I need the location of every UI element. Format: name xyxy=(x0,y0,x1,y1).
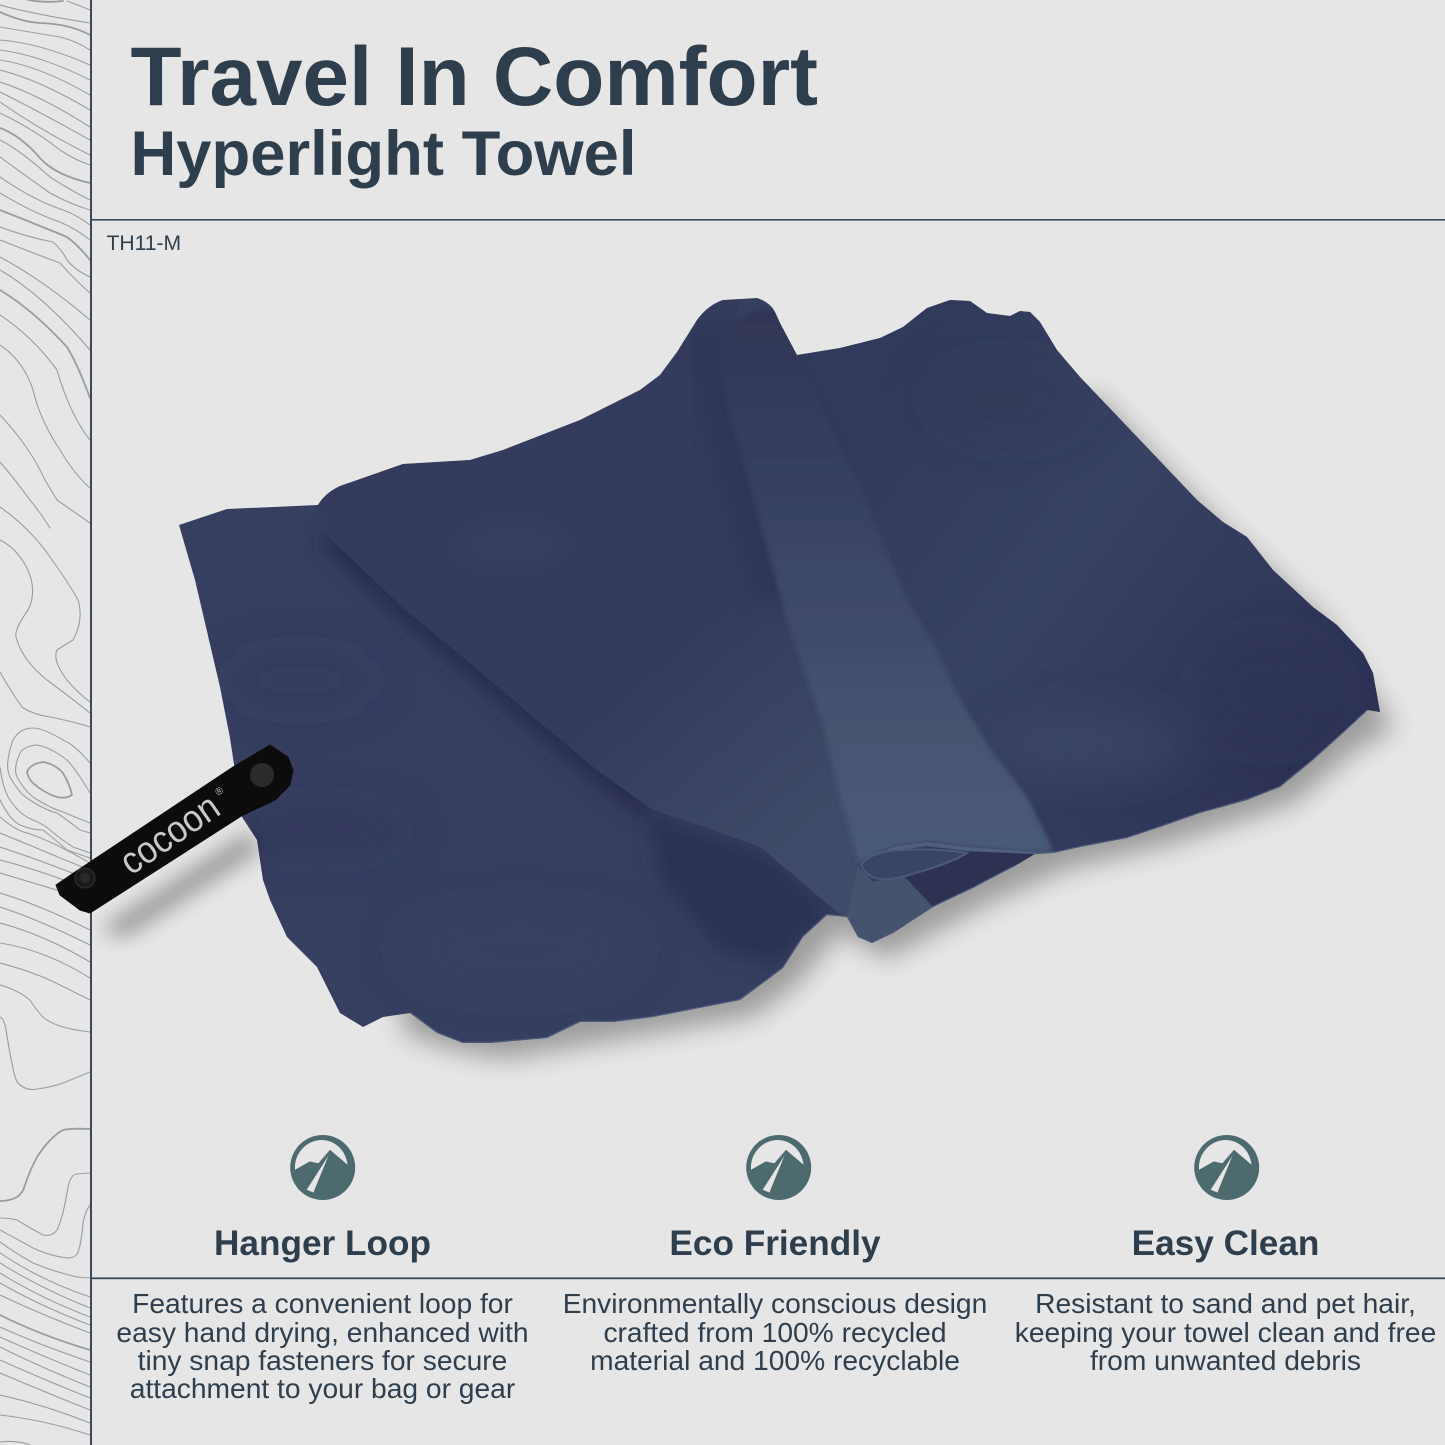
tag shadow xyxy=(100,832,262,938)
stitched hem xyxy=(410,710,1368,1043)
registered mark: ® xyxy=(213,785,226,798)
description: keeping your towel clean and free xyxy=(1015,1316,1436,1348)
title block xyxy=(130,29,818,189)
description: from unwanted debris xyxy=(1090,1344,1361,1376)
crease shadow xyxy=(327,535,653,812)
left towel panel xyxy=(170,290,1390,1050)
topographic contour strip xyxy=(0,0,90,1445)
middle panel dark edge near ridge xyxy=(705,330,775,600)
right panel shading xyxy=(1073,735,1145,756)
right towel panel xyxy=(797,300,1380,853)
description: attachment to your bag or gear xyxy=(130,1372,515,1404)
icon: mountain badge xyxy=(290,1135,355,1200)
description: crafted from 100% recycled xyxy=(603,1316,947,1348)
lower panel dark corner xyxy=(652,821,828,963)
towel xyxy=(170,290,1390,1050)
fold opening xyxy=(861,849,967,879)
rolled fold strip xyxy=(720,309,1053,863)
description: Resistant to sand and pet hair, xyxy=(1035,1287,1416,1319)
shadow beneath the roll xyxy=(900,851,1036,907)
heading: Hanger Loop xyxy=(214,1224,431,1263)
description: Environmentally conscious design xyxy=(563,1287,987,1319)
feature: Easy Clean xyxy=(1015,1135,1436,1376)
icon: mountain badge xyxy=(746,1135,811,1200)
description: Features a convenient loop for xyxy=(132,1287,513,1319)
snap upper xyxy=(250,763,274,787)
mottling on middle panel xyxy=(455,523,565,567)
hanger loop tag xyxy=(56,745,293,938)
heading: Easy Clean xyxy=(1132,1224,1319,1263)
title: Travel In Comfort xyxy=(130,29,818,123)
snap lower xyxy=(75,868,95,888)
product code: TH11-M xyxy=(106,232,181,255)
middle fold panel xyxy=(318,300,860,925)
tag strap xyxy=(56,745,293,913)
description: easy hand drying, enhanced with xyxy=(116,1316,529,1348)
feature: Eco Friendly xyxy=(563,1135,987,1376)
lower lip of fold xyxy=(847,866,933,943)
feature: Hanger Loop xyxy=(116,1135,529,1404)
description: tiny snap fasteners for secure xyxy=(138,1344,507,1376)
icon: mountain badge xyxy=(1194,1135,1259,1200)
soft mottling on left panel xyxy=(248,826,258,845)
subtitle: Hyperlight Towel xyxy=(130,119,636,189)
brand label: cocoon xyxy=(112,786,228,883)
description: material and 100% recyclable xyxy=(590,1344,960,1376)
heading: Eco Friendly xyxy=(669,1224,881,1263)
roll edge bulge xyxy=(860,842,1053,864)
towel drop shadow xyxy=(394,393,1394,1059)
